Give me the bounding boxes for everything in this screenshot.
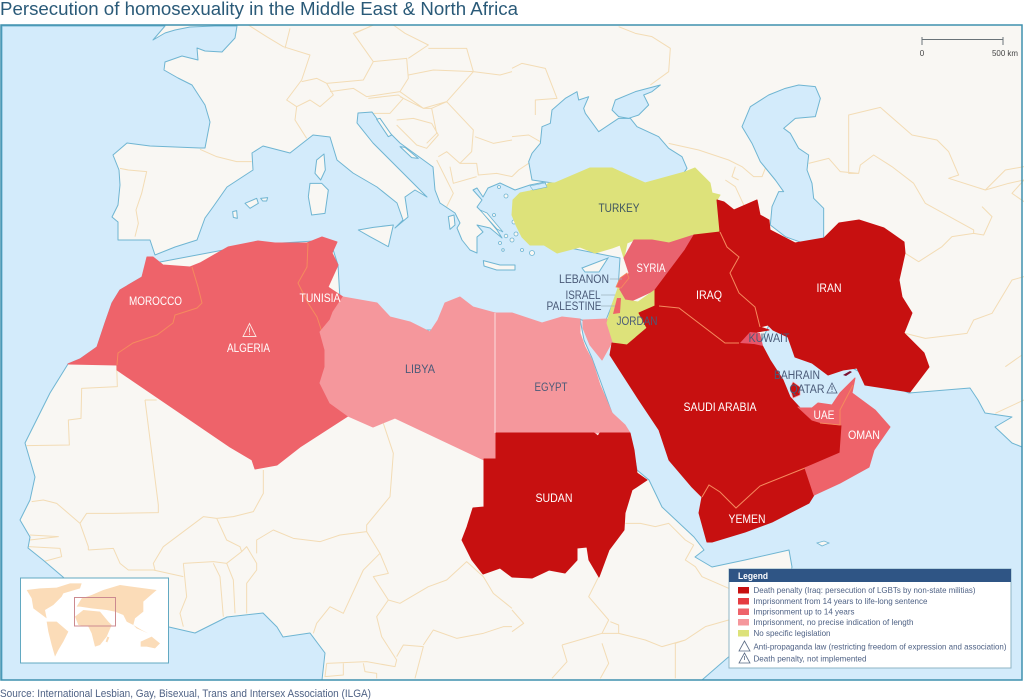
country: Israel and Jordan xyxy=(607,288,658,345)
legend: Imprisonment, no precise indication of length xyxy=(754,617,914,627)
label: UAE: UAE xyxy=(814,410,835,422)
label: Morocco: MOROCCO xyxy=(129,296,182,308)
country: Syria xyxy=(619,235,694,303)
sea: Atlantic and Mediterranean xyxy=(2,26,620,680)
inset world map xyxy=(20,578,168,663)
sea: Caspian Sea xyxy=(742,85,824,243)
label: Qatar: QATAR xyxy=(790,384,824,396)
country: Iraq xyxy=(655,232,769,343)
Sea of Marmara xyxy=(530,183,547,190)
Qeshm island xyxy=(843,371,852,376)
country: Iran xyxy=(717,200,929,392)
country: Kuwait xyxy=(740,332,763,346)
label: Israel: ISRAEL xyxy=(566,290,601,302)
legend: Death penalty, not implemented xyxy=(754,654,867,664)
label: Iraq: IRAQ xyxy=(696,290,722,302)
Libya-Egypt border xyxy=(494,313,496,433)
scale bar: 500 km xyxy=(992,49,1018,58)
label: Lebanon: LEBANON xyxy=(559,274,609,286)
country: Egypt xyxy=(495,313,630,433)
Aegean islands xyxy=(480,186,534,256)
Socotra xyxy=(817,541,829,546)
label: Libya: LIBYA xyxy=(405,364,435,376)
legend: Imprisonment from 14 years to life-long sentence xyxy=(754,596,928,606)
label: Egypt: EGYPT xyxy=(534,382,568,394)
label: Iran: IRAN xyxy=(816,283,842,295)
land borders, Europe xyxy=(120,25,512,237)
country: Turkey xyxy=(512,168,720,258)
sea: Black Sea xyxy=(529,85,687,183)
icon: Qatar warning triangle xyxy=(827,383,837,393)
label: Algeria: ALGERIA xyxy=(227,343,270,355)
country: Lebanon xyxy=(616,273,629,288)
Saudi Arabia-Iraq border xyxy=(659,306,739,343)
legend: Legend xyxy=(738,571,768,582)
Qatar xyxy=(790,382,800,398)
UAE-Oman border xyxy=(820,385,853,425)
label: Bahrain: BAHRAIN xyxy=(774,370,820,382)
Saudi Arabia-Yemen border xyxy=(702,455,840,508)
sea: Red Sea, Persian Gulf and Arabian Sea xyxy=(580,319,1022,680)
country: Morocco, Algeria, Tunisia xyxy=(68,237,348,469)
source note: Source: International Lesbian, Gay, Bisexual, Trans and Intersex Association (ILGA) xyxy=(0,688,371,700)
Morocco-Algeria border xyxy=(117,267,202,365)
icon: Algeria warning triangle xyxy=(243,324,256,336)
label: Oman: OMAN xyxy=(848,430,880,442)
country: Libya xyxy=(320,297,495,460)
label: Saudi Arabia: SAUDI ARABIA xyxy=(684,402,757,414)
Sinai xyxy=(583,319,612,360)
label: Tunisia: TUNISIA xyxy=(300,293,341,305)
country: Saudi Arabia and Yemen xyxy=(610,306,842,542)
legend: Anti-propaganda law (restricting freedom of expression and association) xyxy=(754,642,1007,652)
country: Sudan xyxy=(462,433,647,578)
label: Turkey: TURKEY xyxy=(598,203,640,215)
legend: No specific legislation xyxy=(754,628,831,638)
label: Kuwait: KUWAIT xyxy=(748,333,790,345)
legend: Death penalty (Iraq: persecution of LGBTs by non-state militias) xyxy=(754,585,976,595)
land borders, East Africa and South Asia xyxy=(512,355,1024,678)
legend xyxy=(729,569,1011,668)
label: Sudan: SUDAN xyxy=(536,493,572,505)
scale bar xyxy=(920,37,1018,58)
Cyprus xyxy=(582,258,608,272)
Algeria-Tunisia border xyxy=(298,243,322,332)
Iraq-Iran border xyxy=(720,232,760,327)
label: Jordan: JORDAN xyxy=(616,316,658,328)
country: Palestine xyxy=(613,298,621,314)
scale bar: 0 xyxy=(920,49,925,58)
label: Palestine: PALESTINE xyxy=(546,301,602,313)
land borders, Eastern Europe and Central Asia xyxy=(512,27,1024,338)
leader lines xyxy=(601,279,622,306)
legend: Imprisonment up to 14 years xyxy=(754,606,854,616)
land borders, West Africa xyxy=(27,365,512,678)
Mediterranean islands xyxy=(233,118,515,270)
label: Syria: SYRIA xyxy=(636,263,666,275)
label: Yemen: YEMEN xyxy=(728,514,766,526)
country: UAE and Oman xyxy=(798,378,890,495)
